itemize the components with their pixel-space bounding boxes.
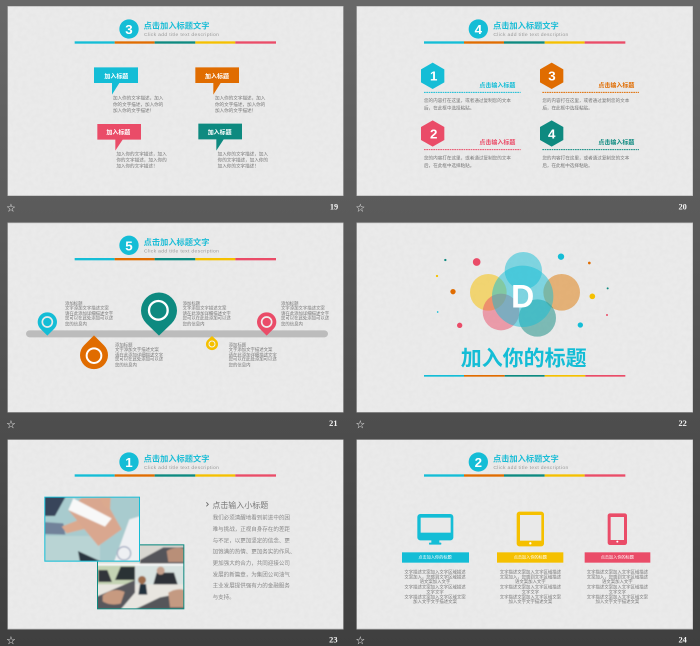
column 3: 加入文字文字描述文案 — [595, 598, 640, 605]
footer star: ☆ — [356, 636, 365, 646]
slide 20: hexagon list — [356, 6, 693, 213]
text: point 2: 您的信息内 — [183, 320, 205, 327]
column 1: 语文案加入文字 — [420, 578, 451, 585]
text: point 4: 请在此添加详细描述文字 — [115, 351, 164, 358]
item 1 — [421, 63, 521, 112]
callout: orange: 加入你的文字描述！ — [215, 107, 256, 114]
callout: red — [97, 124, 167, 170]
callout: red: 你的文字描述，加入你的 — [116, 156, 167, 163]
text: point 4 — [115, 341, 164, 369]
column 2: 文字描述文案加入文字区域文案 — [500, 593, 562, 600]
chevron — [206, 502, 208, 506]
slide background — [356, 440, 693, 629]
column 3: 文字文字 — [609, 588, 627, 595]
header number badge — [469, 452, 488, 472]
callout: teal — [198, 124, 268, 170]
item 1: 您的内容打在这里，或者通过复制您的文本 — [424, 97, 511, 104]
item 1: 1 — [430, 68, 438, 83]
column 3: 文字描述文案加入文字区域描述 — [587, 584, 649, 591]
slide 21: pin timeline — [7, 223, 344, 429]
heading: 点击加入标题文字 — [144, 237, 209, 247]
decorative dots — [436, 253, 609, 328]
icon: tablet — [517, 512, 544, 546]
item 4: 4 — [548, 126, 556, 141]
callout: red: 加入标题 — [106, 128, 130, 136]
footer star: ☆ — [356, 203, 365, 213]
callout: red: 加入你的文字描述，加入 — [116, 150, 167, 157]
header number badge: 4 — [475, 22, 483, 37]
slide 23: photos with text — [7, 440, 344, 646]
page number: 20 — [678, 203, 687, 212]
text: point 5: 请在此添加详细描述文字 — [229, 351, 277, 358]
header number badge: 2 — [475, 455, 482, 470]
heading: 点击加入标题文字 — [144, 21, 209, 31]
slide background — [8, 223, 344, 412]
icon: phone — [608, 513, 627, 545]
slide content — [356, 19, 687, 213]
slide content — [7, 452, 337, 646]
slide background — [8, 6, 344, 196]
column 3: 文字描述文案加入文字区域描述 — [587, 569, 649, 576]
heading: 点击加入标题文字 — [493, 21, 559, 31]
item 4: 后，在此框中选择粘贴。 — [542, 162, 593, 169]
text: point 1: 请在此添加详细描述文字 — [65, 310, 114, 317]
column 2: 文案加入，您感到文字区域描述 — [500, 573, 562, 580]
body paragraph: 难与挑战，正视自身存在的差距 — [213, 525, 290, 533]
slide content — [356, 252, 687, 429]
text: point 1: 添加标题 — [65, 300, 83, 307]
colour divider — [75, 41, 276, 44]
column 1: 文字文字 — [426, 588, 444, 595]
footer star: ☆ — [7, 636, 16, 646]
page number: 21 — [329, 419, 337, 428]
column 1 — [402, 552, 469, 605]
pin: red — [257, 312, 276, 336]
photo: hands and tablet — [43, 496, 141, 562]
subheading: Click add title text description — [144, 465, 219, 471]
callout: cyan: 你的文字描述，加入你的 — [113, 101, 164, 108]
slide content — [7, 236, 337, 429]
column 3: 语文案加入文字 — [602, 578, 633, 585]
text: point 5 — [229, 341, 277, 369]
heading: 点击加入标题文字 — [493, 454, 559, 464]
header number badge — [119, 236, 139, 255]
item 2: 您的内容打在这里，或者通过复制您的文本 — [424, 154, 511, 161]
slide 22: section title D — [356, 223, 693, 429]
body paragraph: 发展的新篇章，为集团公司油气 — [213, 570, 290, 578]
text: point 1: 您的信息内 — [65, 320, 87, 327]
callout: orange: 加入你的文字描述，加入 — [215, 95, 266, 102]
body paragraph: 与支持。 — [213, 593, 235, 601]
colour divider — [75, 258, 276, 260]
overlapping circles emblem — [470, 252, 580, 337]
item 2: 点击输入标题 — [479, 139, 515, 147]
body paragraph: 加饱满的热情、更加务实的作风、 — [213, 548, 295, 556]
item 3: 后，在此框中选择粘贴。 — [542, 105, 593, 112]
subheading: 点击输入小标题 — [212, 500, 268, 510]
colour divider — [75, 474, 276, 477]
text: point 3: 您可以在此处添加可以述 — [281, 314, 330, 321]
subheading: Click add title text description — [493, 32, 569, 38]
callout: teal: 你的文字描述，加入你的 — [218, 156, 268, 163]
footer star: ☆ — [356, 419, 365, 429]
header number badge — [119, 19, 139, 39]
column 3: 文案加入，您感到文字区域描述 — [587, 573, 649, 580]
text: point 4: 您可以在此处添加可以述 — [115, 356, 164, 363]
subheading: Click add title text description — [493, 465, 569, 471]
page number: 24 — [678, 636, 688, 645]
item 3: 点击输入标题 — [598, 81, 634, 89]
text: point 3: 请在此添加详细描述文字 — [281, 310, 330, 317]
header number badge: 1 — [125, 455, 133, 470]
callout: orange: 你的文字描述，加入你的 — [215, 101, 266, 108]
subheading: Click add title text description — [144, 248, 219, 254]
footer star: ☆ — [7, 419, 16, 429]
item 3 — [540, 63, 639, 112]
footer star: ☆ — [7, 203, 16, 213]
callout: orange — [195, 67, 266, 114]
body paragraph: 主业发展提供强有力的金融服务 — [213, 582, 290, 590]
item 2: 后，在此框中选择粘贴。 — [424, 162, 474, 169]
heading: 点击加入标题文字 — [144, 454, 209, 464]
slide content — [356, 452, 688, 646]
body paragraph: 更加强大的合力，共同迎接公司 — [213, 559, 290, 567]
header number badge — [119, 452, 139, 472]
column 2: 点击加入你的标题 — [514, 553, 547, 559]
callout: teal: 加入标题 — [208, 128, 232, 136]
text: point 2: 文字添加文字描述文案 — [183, 305, 227, 312]
column 3: 文字描述文案加入文字区域文案 — [587, 593, 649, 600]
column 2: 语文案加入文字 — [515, 578, 546, 585]
text: point 3: 您的信息内 — [281, 320, 303, 327]
header number badge: 3 — [125, 22, 133, 37]
callout: teal: 加入你的文字描述！ — [218, 163, 259, 170]
column 1: 文字描述文案加入文字区域文案 — [404, 593, 466, 600]
colour divider — [424, 375, 625, 377]
slide background — [356, 6, 693, 196]
item 4: 点击输入标题 — [598, 139, 634, 147]
item 2 — [421, 120, 521, 169]
pin: yellow — [206, 336, 218, 350]
column 1: 文字描述文案加入文字区域描述 — [404, 584, 466, 591]
text: point 1: 文字添加文字描述文案 — [65, 305, 109, 312]
page number: 22 — [678, 419, 687, 428]
text: point 5: 您可以在此处添加可以述 — [229, 356, 277, 363]
text: point 5: 文字添加文字描述文案 — [229, 346, 273, 353]
column 1: 文字描述文案加入文字区域描述 — [404, 569, 466, 576]
timeline bar — [26, 330, 328, 337]
column 1: 加入文字文字描述文案 — [413, 598, 457, 605]
text: point 2: 您可以在此处添加可以述 — [183, 314, 231, 321]
slide 19: speech bubble callouts — [7, 6, 344, 213]
section title: 加入你的标题 — [461, 348, 587, 371]
text: point 1: 您可以在此处添加可以述 — [65, 314, 114, 321]
page number: 23 — [329, 636, 337, 645]
header number badge — [469, 19, 488, 39]
text: point 5: 添加标题 — [229, 341, 247, 348]
item 1: 后，在此框中选择粘贴。 — [424, 105, 474, 112]
slide 24: devices — [356, 440, 693, 646]
body paragraph: 我们必须清醒地看到前进中的困 — [213, 514, 290, 522]
text: point 5: 您的信息内 — [229, 362, 251, 369]
column 2: 文字文字 — [522, 588, 540, 595]
callout: cyan: 加入你的文字描述！ — [113, 107, 154, 114]
column 2: 文字描述文案加入文字区域描述 — [500, 569, 562, 576]
text: point 3: 文字添加文字描述文案 — [281, 305, 325, 312]
column 2 — [497, 552, 563, 605]
callout: red: 加入你的文字描述！ — [116, 163, 158, 170]
item 4 — [540, 120, 639, 169]
text: point 1 — [65, 300, 114, 327]
column 2: 文字描述文案加入文字区域描述 — [500, 584, 562, 591]
callout: cyan: 加入标题 — [104, 72, 128, 80]
column 1: 点击加入你的标题 — [418, 553, 452, 559]
text: point 4: 您的信息内 — [115, 362, 137, 369]
column 1: 文案加入，您感到文字区域描述 — [404, 573, 466, 580]
colour divider — [424, 474, 625, 477]
item 2: 2 — [430, 126, 437, 141]
slide background — [356, 223, 693, 412]
icon: monitor — [417, 514, 453, 545]
column 3 — [585, 552, 650, 605]
callout: orange: 加入标题 — [205, 72, 229, 80]
pin: orange — [80, 335, 108, 369]
header number badge: 5 — [125, 238, 133, 253]
callout: teal: 加入你的文字描述，加入 — [218, 150, 268, 157]
body paragraph — [213, 514, 295, 601]
body paragraph: 与不足，以更加坚定的信念、更 — [213, 536, 290, 544]
slide background — [8, 440, 344, 629]
overlapping circles emblem: D — [511, 279, 534, 315]
text: point 4: 文字添加文字描述文案 — [115, 346, 159, 353]
text: point 4: 添加标题 — [115, 341, 133, 348]
photo: handshake collage — [97, 544, 185, 609]
callout: cyan: 加入你的文字描述，加入 — [113, 95, 164, 102]
slide content — [7, 19, 338, 213]
item 4: 您的内容打在这里，或者通过复制您的文本 — [542, 154, 630, 161]
column 2: 加入文字文字描述文案 — [508, 598, 553, 605]
callout: cyan — [94, 67, 164, 114]
text: point 2 — [183, 300, 231, 327]
text: point 2: 添加标题 — [183, 300, 201, 307]
page number: 19 — [330, 203, 338, 212]
column 3: 点击加入你的标题 — [601, 553, 634, 559]
pin: cyan — [38, 312, 57, 336]
pin: teal — [141, 293, 177, 336]
item 3: 您的内容打在这里，或者通过复制您的文本 — [542, 97, 630, 104]
subheading: Click add title text description — [144, 32, 219, 38]
text: point 3 — [281, 300, 330, 327]
item 1: 点击输入标题 — [479, 81, 515, 89]
text: point 3: 添加标题 — [281, 300, 299, 307]
item 3: 3 — [548, 68, 556, 83]
colour divider — [424, 41, 625, 44]
text: point 2: 请在此添加详细描述文字 — [183, 310, 231, 317]
